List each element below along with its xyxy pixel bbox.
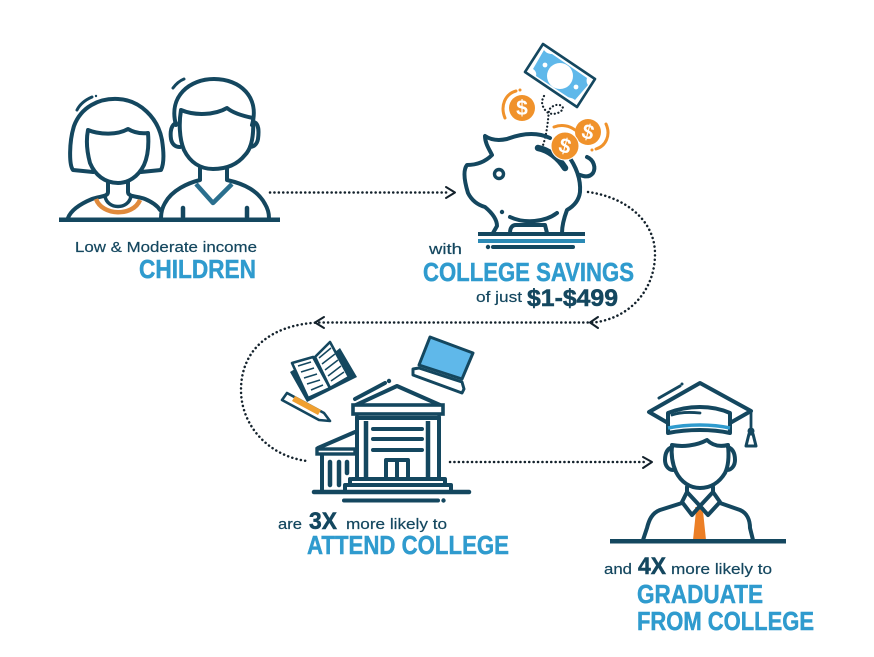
text: are 3X more likely to attend college — [278, 508, 509, 560]
icon: girl — [68, 95, 163, 218]
text: and 4X more likely to graduate from college — [604, 553, 814, 636]
text: low and moderate income children: Low & Moderate income — [75, 239, 257, 256]
text: and 4X more likely to graduate from college: FROM COLLEGE — [637, 606, 814, 636]
icon: coin stack right — [551, 119, 608, 160]
text: are 3X more likely to attend college: 3X — [309, 508, 337, 535]
text: are 3X more likely to attend college: more likely to — [346, 516, 447, 533]
text: with college savings of just $1-$499: $1-$499 — [527, 285, 618, 312]
arrow: college to graduate — [450, 457, 652, 468]
icon: coin stack right: $ — [579, 120, 597, 145]
text: and 4X more likely to graduate from college: and — [604, 561, 632, 578]
text: with college savings of just $1-$499: COLLEGE SAVINGS — [423, 257, 634, 287]
icon: two children — [59, 79, 280, 222]
icon: graduate — [610, 382, 786, 544]
icon: boy — [161, 79, 269, 218]
arrow: money path into slot — [542, 96, 563, 148]
icon: open book — [290, 342, 357, 402]
icon: coin stack right: $ — [556, 134, 574, 159]
text: and 4X more likely to graduate from college: 4X — [638, 553, 666, 580]
text: are 3X more likely to attend college: ATTEND COLLEGE — [307, 530, 509, 560]
arrow: children to savings — [270, 187, 455, 198]
text: with college savings of just $1-$499 — [423, 241, 634, 312]
text: and 4X more likely to graduate from college: GRADUATE — [637, 579, 763, 609]
icon: coin left — [503, 88, 535, 121]
text: with college savings of just $1-$499: with — [428, 241, 462, 258]
text: with college savings of just $1-$499: of just — [476, 289, 523, 306]
text: are 3X more likely to attend college: are — [278, 516, 302, 533]
icon: laptop — [413, 337, 473, 393]
text: and 4X more likely to graduate from college: more likely to — [671, 561, 772, 578]
icon: pencil — [282, 393, 330, 421]
text: low and moderate income children — [75, 239, 257, 284]
icon: coin left: $ — [516, 97, 528, 120]
icon: dollar bill — [525, 44, 595, 107]
icon: piggy bank — [464, 134, 594, 249]
icon: college building — [314, 379, 469, 503]
arrow: savings to college — [241, 192, 655, 461]
text: low and moderate income children: CHILDREN — [139, 254, 256, 284]
